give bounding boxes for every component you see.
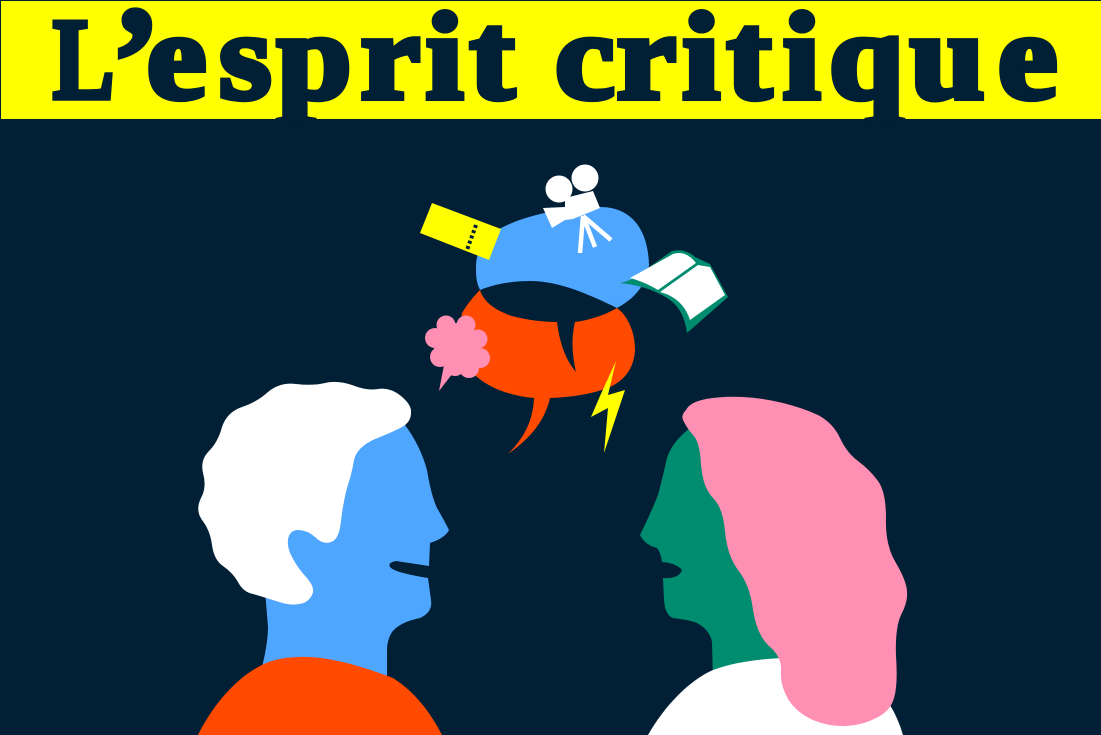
man face and neck <box>260 425 449 685</box>
title <box>53 0 1057 147</box>
icon: pink thought cloud <box>425 316 490 391</box>
speech bubble: red <box>460 290 635 454</box>
icon: open book <box>620 250 728 333</box>
woman hair <box>682 397 907 726</box>
man hair <box>198 382 411 605</box>
woman face and neck <box>640 428 790 680</box>
person: woman in profile <box>640 397 907 735</box>
woman shirt <box>648 658 903 735</box>
central idea cluster <box>420 164 728 454</box>
man shirt <box>198 657 442 735</box>
icon: ticket <box>420 203 501 260</box>
icon: lightning bolt <box>591 361 625 453</box>
speech bubble: blue <box>476 207 649 308</box>
title banner <box>1 0 1101 147</box>
person: man in profile <box>198 382 449 735</box>
icon: film camera <box>543 164 611 253</box>
